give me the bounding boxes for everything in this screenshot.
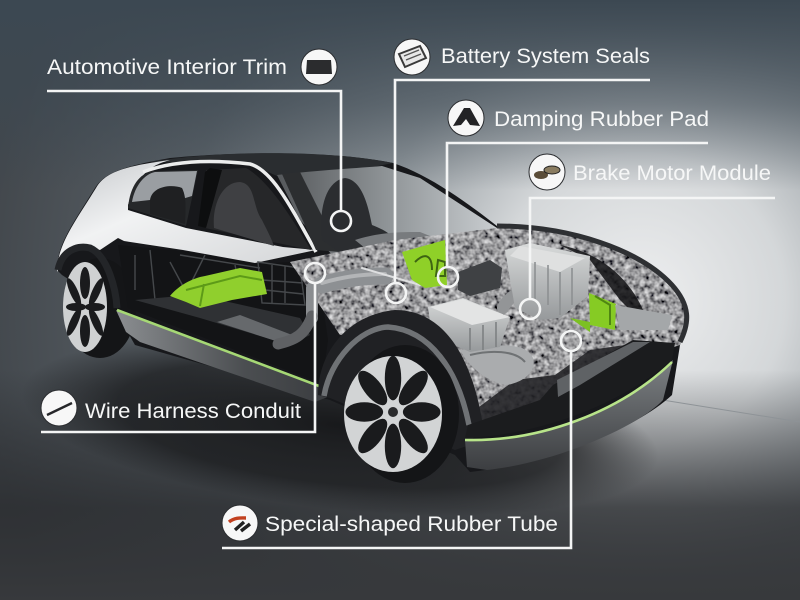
callout: Special-shaped Rubber Tube bbox=[222, 331, 581, 548]
sill accent light bbox=[117, 310, 327, 389]
front motor block bbox=[428, 298, 510, 352]
roof white trim bbox=[143, 162, 316, 252]
callout: Battery System Seals: Battery System Seals bbox=[441, 45, 650, 68]
green battery module bbox=[170, 268, 267, 308]
engine bay textured mechanicals bbox=[290, 228, 684, 420]
ground shadow bbox=[13, 307, 667, 543]
icon: seal gasket bbox=[394, 39, 430, 75]
dark battery top bbox=[458, 260, 502, 296]
icon: conduit bbox=[41, 390, 77, 426]
cabin cutaway bbox=[118, 245, 328, 384]
green upper component bbox=[402, 240, 447, 288]
rear wheel arch bbox=[58, 247, 117, 308]
callout: Battery System Seals bbox=[386, 39, 650, 303]
hood arch bbox=[497, 226, 687, 342]
icon: rubber tube bbox=[222, 505, 258, 541]
silver pipes bbox=[278, 268, 545, 344]
rear door window bbox=[128, 170, 198, 226]
dark lower bay bbox=[475, 345, 625, 435]
icon: interior trim bbox=[301, 49, 337, 85]
front bumper bbox=[465, 340, 675, 470]
callout: Wire Harness Conduit: Wire Harness Conduit bbox=[85, 400, 301, 423]
radiator bracket bbox=[615, 305, 672, 330]
windshield bbox=[277, 166, 497, 258]
front wheel arch panel bbox=[318, 310, 482, 450]
callout: Automotive Interior Trim: Automotive Interior Trim bbox=[47, 56, 287, 79]
green front component bbox=[570, 293, 616, 332]
callout: Wire Harness Conduit bbox=[41, 263, 325, 432]
callout: Automotive Interior Trim bbox=[47, 49, 351, 231]
bumper accent light bbox=[465, 362, 672, 440]
sill panel bbox=[116, 310, 330, 402]
callout: Damping Rubber Pad: Damping Rubber Pad bbox=[494, 108, 709, 131]
white rear quarter and door panel bbox=[57, 160, 316, 272]
roof bbox=[150, 153, 393, 176]
icon: brake motor bbox=[529, 154, 565, 190]
car body silhouette bbox=[57, 153, 687, 472]
rear seat bbox=[150, 186, 186, 224]
callout: Brake Motor Module bbox=[520, 154, 775, 319]
car cutaway illustration bbox=[57, 153, 695, 483]
rear motor block bbox=[505, 243, 590, 320]
front wheel bbox=[344, 345, 459, 483]
rear wheel bbox=[63, 258, 136, 358]
icon: rubber pad bbox=[448, 100, 484, 136]
callout: Brake Motor Module: Brake Motor Module bbox=[573, 162, 771, 185]
front seat behind windshield bbox=[321, 178, 395, 256]
front door window and seat bbox=[205, 168, 311, 250]
silver manifold bbox=[460, 345, 534, 385]
callout: Special-shaped Rubber Tube: Special-shaped Rubber Tube bbox=[265, 513, 558, 536]
callout: Damping Rubber Pad bbox=[438, 100, 709, 287]
floor components bbox=[135, 296, 310, 345]
